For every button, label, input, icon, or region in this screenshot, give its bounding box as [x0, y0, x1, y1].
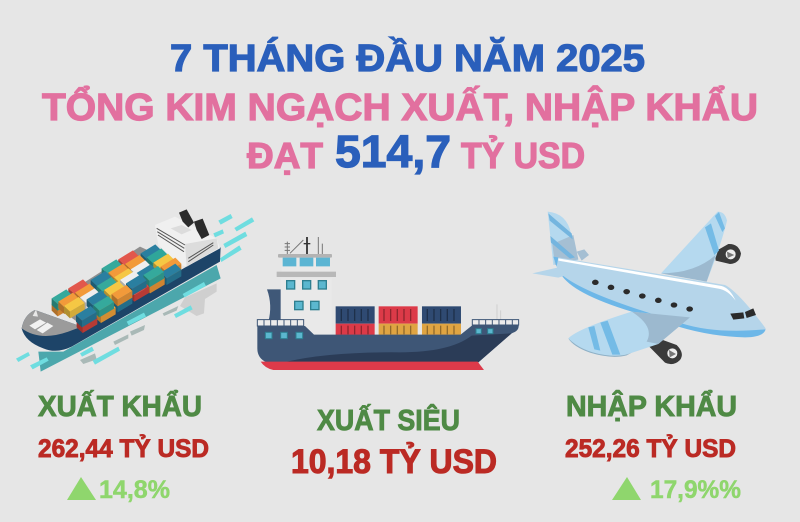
value: 252,26 tỷ usd: 252,26 TỶ USD: [565, 433, 736, 463]
heading: đạt 514,7 tỷ usd: 514,7: [335, 126, 451, 177]
heading: đạt 514,7 tỷ usd: ĐẠT: [247, 135, 323, 176]
heading: đạt 514,7 tỷ usd: TỶ USD: [461, 135, 585, 176]
heading: tổng kim ngạch xuất, nhập khẩu: TỔNG KIM NGẠCH XUẤT, NHẬP KHẨU: [42, 84, 758, 129]
icon: airplane: [532, 212, 766, 364]
label: nhập khẩu: NHẬP KHẨU: [566, 389, 737, 423]
value: 262,44 tỷ usd: 262,44 TỶ USD: [38, 433, 209, 463]
block: xuất khẩu: [38, 389, 209, 504]
change: 17,9%%: 17,9%%: [650, 476, 741, 504]
value: 10,18 tỷ usd: 10,18 TỶ USD: [291, 443, 497, 481]
heading: đạt 514,7 tỷ usd: [247, 126, 585, 177]
icon: up triangle: [67, 477, 96, 500]
label: xuất khẩu: XUẤT KHẨU: [38, 389, 202, 423]
title: 7 tháng đầu năm 2025: 7 THÁNG ĐẦU NĂM 2025: [170, 36, 645, 80]
label: xuất siêu: XUẤT SIÊU: [317, 403, 460, 437]
icon: up triangle: [612, 477, 641, 500]
block: xuất siêu: [291, 403, 497, 481]
icon: side-view cargo ship: [257, 237, 519, 370]
change: 14,8%: 14,8%: [99, 476, 170, 504]
icon: isometric container ship: [16, 209, 254, 372]
block: nhập khẩu: [565, 389, 741, 504]
